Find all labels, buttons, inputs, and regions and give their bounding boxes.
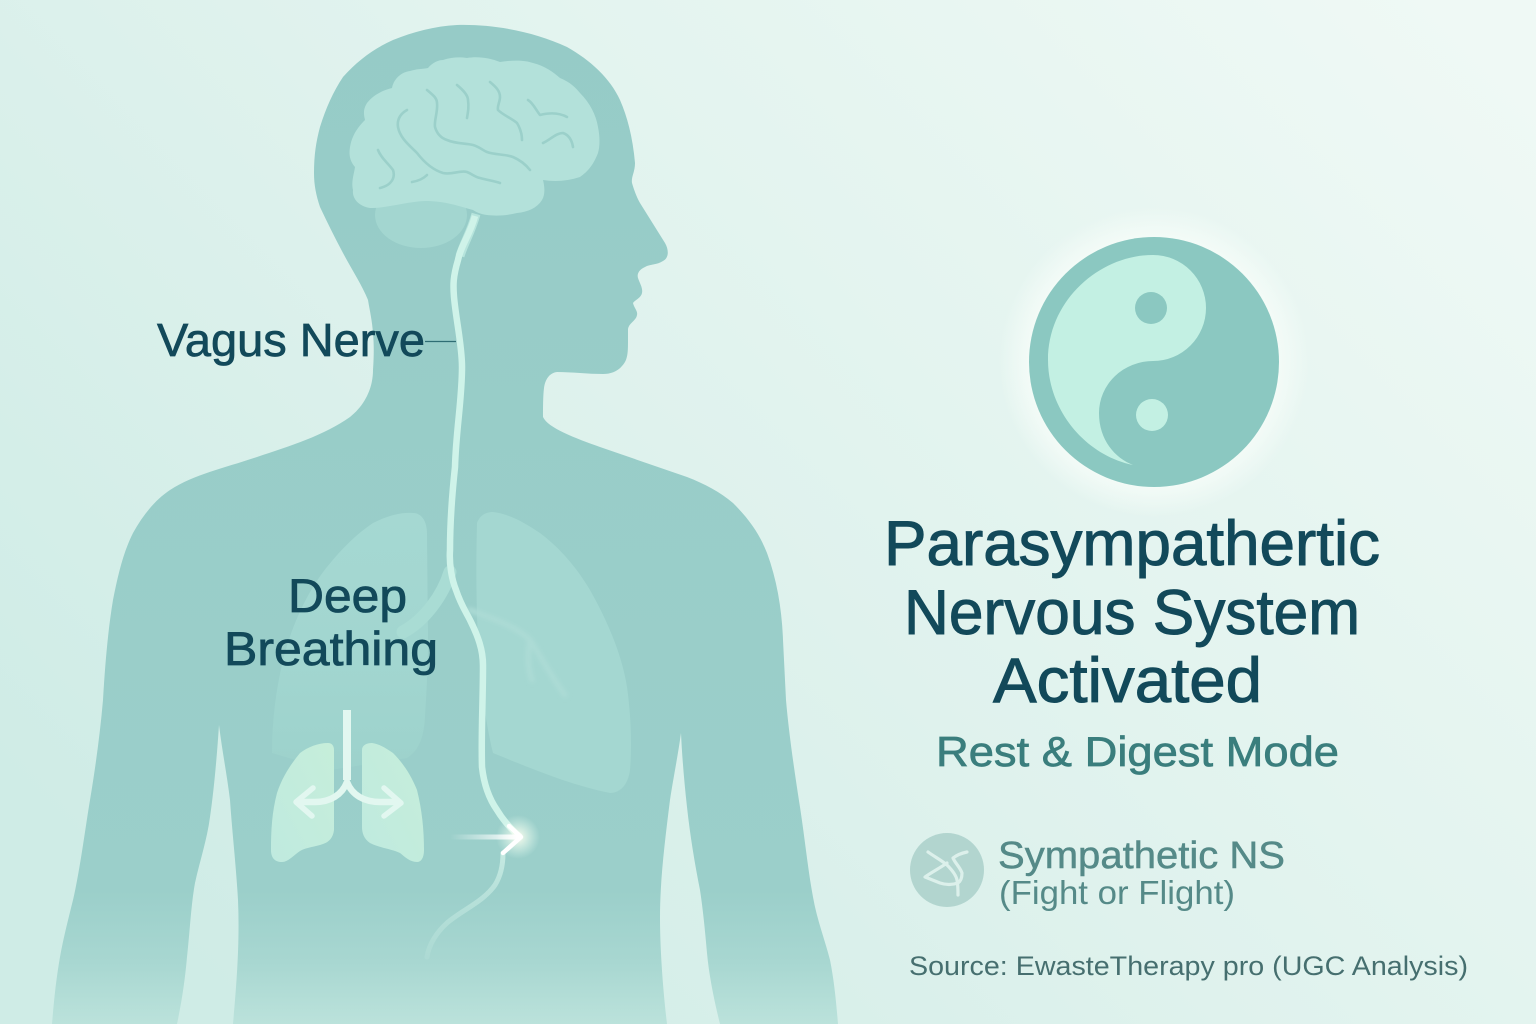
Fight or Flight label: (Fight or Flight)	[999, 874, 1235, 911]
title line 2: Nervous System	[904, 578, 1360, 648]
small right lung	[362, 743, 424, 862]
dark dot	[1135, 292, 1167, 324]
disc	[1029, 237, 1279, 487]
nerve main trunk	[450, 216, 520, 837]
nerve root under brain	[460, 214, 476, 256]
body silhouette	[52, 25, 838, 1024]
title line 1: Parasympathertic	[884, 509, 1380, 579]
cerebellum	[375, 182, 467, 248]
nerve tail fading downward	[427, 853, 503, 957]
legend: sympathetic NS	[910, 833, 1285, 911]
vagus nerve line	[450, 214, 520, 837]
Breathing: Breathing	[224, 622, 438, 675]
small left lung	[271, 743, 334, 862]
large faint left lung	[272, 513, 428, 770]
leader line	[425, 340, 456, 342]
label: Deep Breathing	[224, 569, 438, 675]
faint bronchial branch in right lung	[470, 610, 565, 695]
cerebrum	[350, 57, 600, 216]
brain	[350, 57, 600, 248]
brain folds	[378, 82, 573, 188]
small lungs icon	[271, 710, 424, 862]
source note: Source: EwasteTherapy pro (UGC Analysis)	[909, 951, 1468, 981]
badge disc	[910, 833, 984, 907]
icon: yin yang	[999, 207, 1309, 517]
Sympathetic NS label: Sympathetic NS	[998, 835, 1285, 877]
title line 3: Activated	[993, 646, 1262, 716]
badge strokes	[925, 852, 967, 895]
nerve branch to left lung	[403, 572, 450, 632]
spark glow	[496, 815, 540, 859]
light swirl	[1048, 255, 1206, 465]
figure: human body silhouette	[52, 25, 838, 1024]
title	[884, 509, 1380, 716]
icon: sympathetic badge	[910, 833, 984, 907]
arrow tip	[503, 826, 521, 853]
light dot	[1136, 399, 1168, 431]
Vagus Nerve text: Vagus Nerve	[157, 314, 425, 366]
trachea and breathing arrows	[296, 710, 401, 816]
halo	[999, 207, 1309, 517]
pulse line	[450, 834, 518, 840]
subtitle: Rest & Digest Mode	[936, 728, 1339, 775]
glowing spark arrow	[450, 815, 540, 859]
large faint right lung	[476, 512, 631, 793]
Deep: Deep	[288, 569, 407, 622]
